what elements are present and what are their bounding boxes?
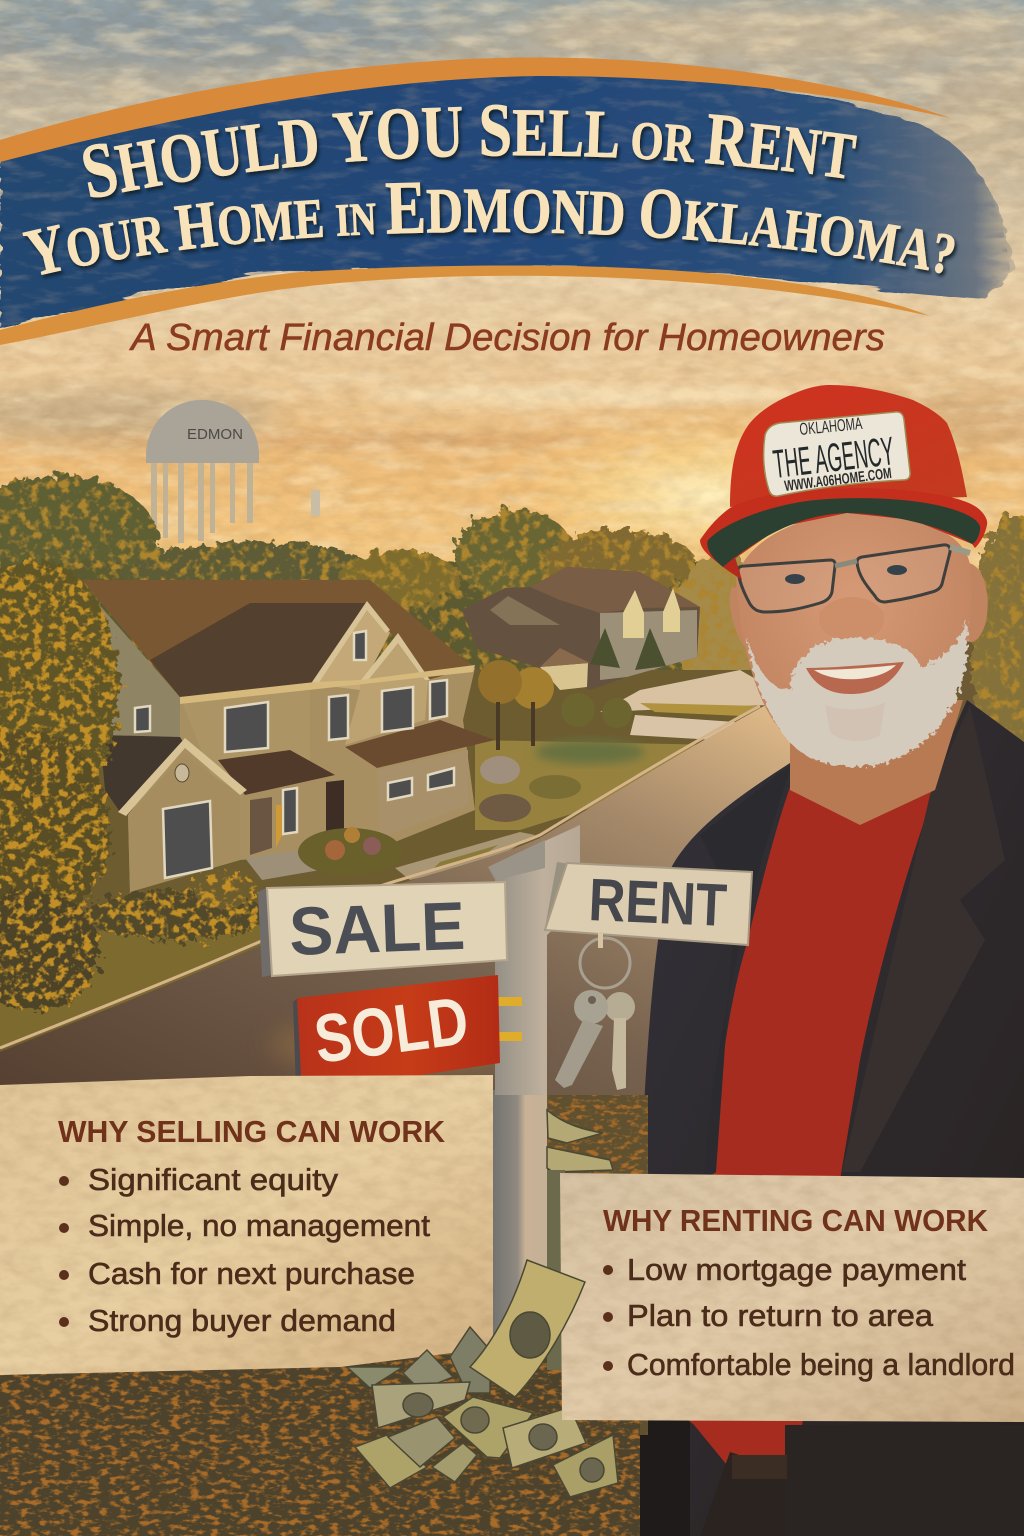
man: red cap bbox=[700, 385, 987, 580]
money over left panel bbox=[372, 1327, 490, 1428]
bullet list: Plan to return to area bbox=[627, 1298, 934, 1333]
cap patch: OKLAHOMA bbox=[799, 414, 864, 439]
money pile bbox=[347, 1110, 618, 1497]
rent sign: RENT bbox=[587, 866, 728, 939]
title: YOUR HOME IN EDMOND OKLAHOMA? bbox=[22, 182, 959, 280]
sold sign: SOLD bbox=[310, 982, 473, 1078]
road orange wash bbox=[270, 1015, 530, 1075]
water tower: EDMON bbox=[187, 426, 243, 443]
main house bbox=[68, 580, 495, 892]
panel: why renting can work bbox=[560, 1173, 1024, 1422]
bullet list bbox=[603, 1252, 1015, 1382]
bullet list: Significant equity bbox=[88, 1162, 339, 1197]
distant houses bbox=[462, 567, 700, 822]
bullet list: Low mortgage payment bbox=[627, 1252, 966, 1287]
signpost bbox=[488, 825, 580, 1425]
road bbox=[0, 700, 800, 1095]
heading: WHY RENTING CAN WORK bbox=[603, 1203, 989, 1238]
title banner bbox=[0, 58, 1015, 345]
cap patch: WWW.A06HOME.COM bbox=[783, 465, 893, 495]
bullet list: Cash for next purchase bbox=[88, 1256, 415, 1291]
sale sign bbox=[258, 882, 507, 977]
man: jacket bbox=[625, 700, 1024, 1536]
bullet list: Simple, no management bbox=[88, 1208, 430, 1243]
foreground grass bbox=[0, 1095, 648, 1536]
water tower bbox=[146, 400, 320, 543]
left trees and bushes bbox=[0, 560, 265, 1010]
big dollar bill over panels bbox=[470, 1260, 585, 1397]
subtitle: A Smart Financial Decision for Homeowners bbox=[129, 317, 885, 359]
bullet list: Strong buyer demand bbox=[88, 1303, 396, 1338]
sky background bbox=[0, 0, 1024, 640]
icon: keys bbox=[555, 932, 635, 1090]
cap patch bbox=[764, 412, 910, 496]
lawn and ground bbox=[0, 670, 960, 1095]
title bbox=[22, 104, 959, 280]
tree line bbox=[0, 475, 1024, 765]
man: glasses bbox=[738, 545, 970, 612]
bullet list bbox=[59, 1162, 430, 1338]
heading: WHY SELLING CAN WORK bbox=[58, 1114, 446, 1149]
title: SHOULD YOU SELL OR RENT bbox=[83, 104, 861, 202]
sale sign: SALE bbox=[288, 888, 466, 970]
panel: why selling can work bbox=[0, 1075, 493, 1375]
road curb line bbox=[0, 706, 760, 1048]
man: face and beard bbox=[730, 513, 988, 825]
bullet list: Comfortable being a landlord bbox=[627, 1347, 1015, 1382]
